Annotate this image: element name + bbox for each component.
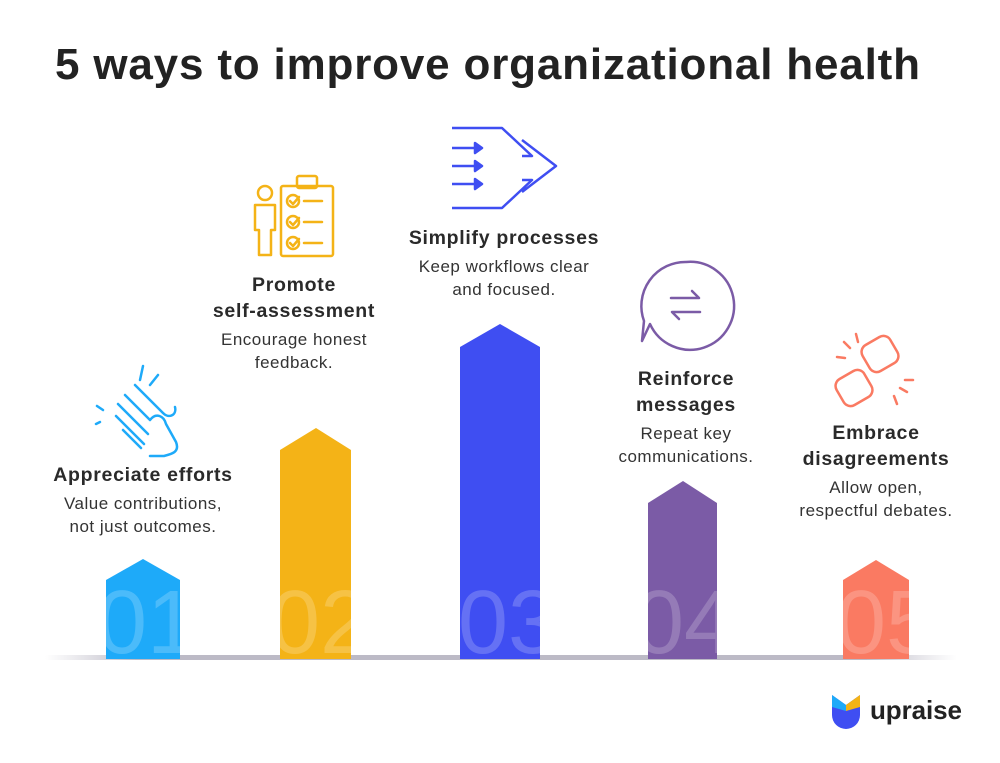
icon: clapping hands [96,366,177,456]
text 5: Allow open, [829,478,923,497]
text 4: communications. [618,447,754,466]
icon: clipboard [255,176,333,256]
text 5 [799,422,953,520]
bar 2 [280,428,351,659]
logo: upraise [832,695,962,729]
bar 4 [648,481,717,659]
text 2: self-assessment [213,300,375,322]
text 1: Appreciate efforts [53,464,233,486]
text 2: Encourage honest [221,330,367,349]
text 3: Keep workflows clear [419,257,589,276]
text 4: messages [636,394,736,416]
text 4 [618,368,754,466]
text 3: and focused. [452,280,556,299]
baseline shadow [45,655,957,660]
logo: upraise: upraise [870,695,962,725]
icon: chat refresh [641,262,734,350]
text 3: Simplify processes [409,227,599,249]
text 5: respectful debates. [799,501,953,520]
bar 5: 05 [836,573,936,673]
text 2: Promote [252,274,336,296]
icon: funnel arrows [452,128,556,208]
bar 3: 03 [458,573,558,673]
bar 3 [460,324,540,659]
text 1: not just outcomes. [70,517,216,536]
text 4: Repeat key [640,424,732,443]
text 2: feedback. [255,353,333,372]
text 5: Embrace [832,422,920,444]
text 5: disagreements [803,448,949,470]
text 2 [213,274,375,372]
bar 4: 04 [634,573,734,673]
text 1 [53,464,233,536]
title: 5 ways to improve organizational health [55,40,920,89]
text 1: Value contributions, [64,494,222,513]
bar 2: 02 [270,573,370,673]
icon: fists [833,333,913,409]
bar 1 [106,559,180,659]
bar 5 [843,560,909,659]
text 4: Reinforce [638,368,734,390]
bar 1: 01 [97,573,197,673]
text 3 [409,227,599,299]
